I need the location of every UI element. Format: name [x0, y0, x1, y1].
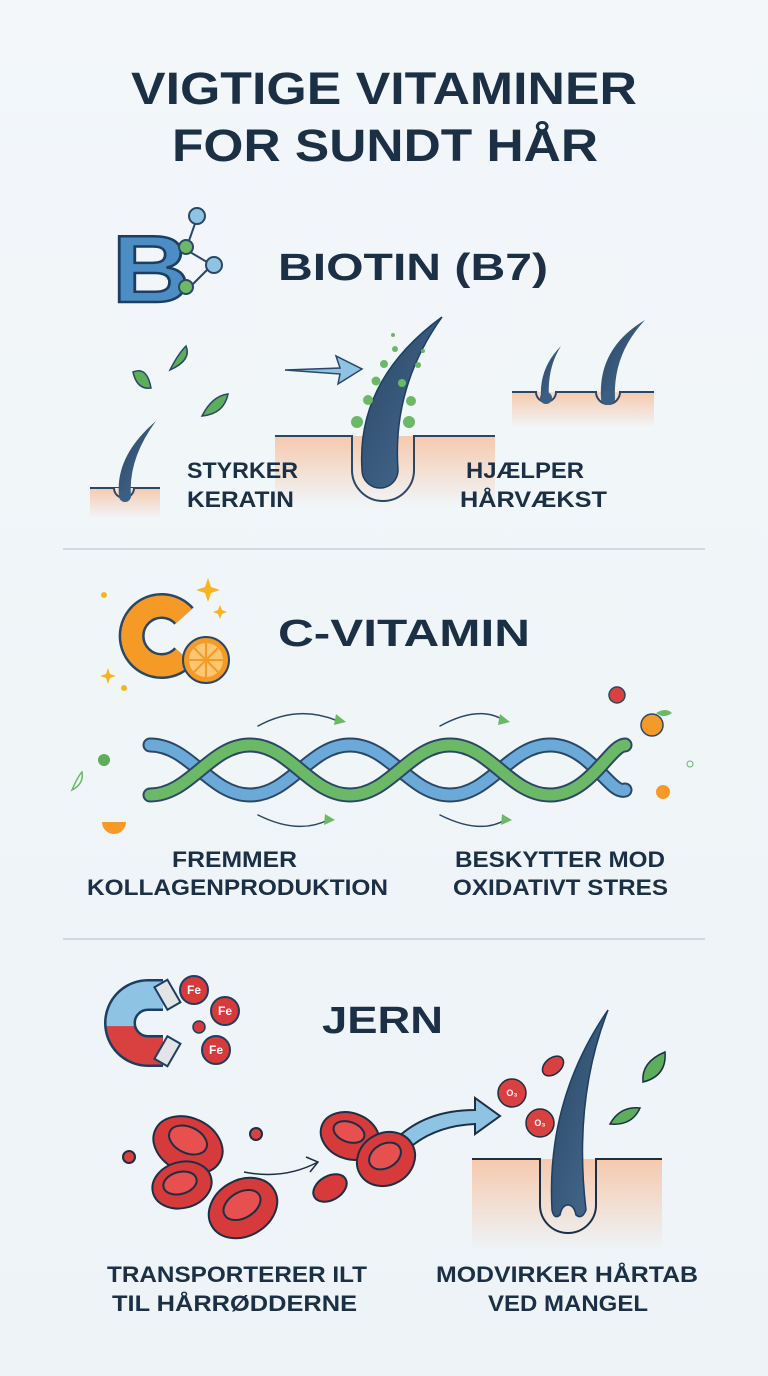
text: modvirker hårtab — [436, 1261, 698, 1316]
text: styrker keratin: KERATIN — [187, 487, 294, 512]
text: hjælper hårvækst: HÅRVÆKST — [460, 486, 608, 512]
icon: magnet with Fe — [120, 976, 239, 1066]
text: beskytter mod oxidativt stres: OXIDATIVT STRES — [453, 875, 668, 900]
text: fremmer kollagenproduktion — [87, 847, 388, 900]
text: transporterer ilt — [107, 1262, 368, 1316]
title: FOR SUNDT HÅR — [172, 120, 598, 171]
panel: c-vitamin — [72, 578, 693, 900]
icon: magnet with Fe: Fe — [209, 1043, 223, 1057]
heading: biotin: BIOTIN (B7) — [278, 247, 548, 289]
title: VIGTIGE VITAMINER — [131, 63, 637, 114]
text: fremmer kollagenproduktion: FREMMER — [172, 847, 297, 872]
icon: main hair follicle — [275, 317, 495, 506]
icon: small hair left — [90, 421, 160, 518]
icon: magnet with Fe: Fe — [218, 1004, 232, 1018]
icon: hair follicle with oxygen: O₃ — [534, 1118, 546, 1128]
text: transporterer ilt: TRANSPORTERER ILT — [107, 1262, 368, 1287]
text: styrker keratin — [187, 458, 298, 512]
text: styrker keratin: STYRKER — [187, 458, 298, 483]
title — [131, 63, 637, 171]
chart: red blood cells — [123, 1098, 500, 1250]
panel: jern — [107, 976, 698, 1316]
text: beskytter mod oxidativt stres — [453, 847, 668, 900]
icon: two hairs right — [512, 320, 654, 428]
heading: c-vitamin: C-VITAMIN — [278, 613, 530, 655]
arrow — [285, 356, 362, 384]
text: beskytter mod oxidativt stres: BESKYTTER MOD — [455, 847, 665, 872]
icon: magnet with Fe: Fe — [187, 983, 201, 997]
text: hjælper hårvækst — [460, 458, 608, 512]
icon: biotin B molecule: B — [112, 216, 190, 323]
icon: biotin B molecule — [112, 208, 222, 323]
icon: leaves — [133, 346, 228, 416]
icon: fruits — [72, 687, 693, 834]
text: fremmer kollagenproduktion: KOLLAGENPRODUKTION — [87, 875, 388, 900]
icon: hair follicle with oxygen: O₃ — [506, 1088, 518, 1098]
icon: C with orange — [100, 578, 229, 691]
heading: jern: JERN — [322, 1000, 443, 1042]
text: hjælper hårvækst: HJÆLPER — [466, 458, 584, 483]
text: transporterer ilt: TIL HÅRRØDDERNE — [112, 1290, 357, 1316]
panel: biotin — [90, 208, 654, 518]
text: modvirker hårtab: VED MANGEL — [488, 1291, 648, 1316]
text: modvirker hårtab: MODVIRKER HÅRTAB — [436, 1261, 698, 1287]
chart: collagen helix — [150, 714, 625, 826]
icon: hair follicle with oxygen — [472, 1010, 665, 1249]
